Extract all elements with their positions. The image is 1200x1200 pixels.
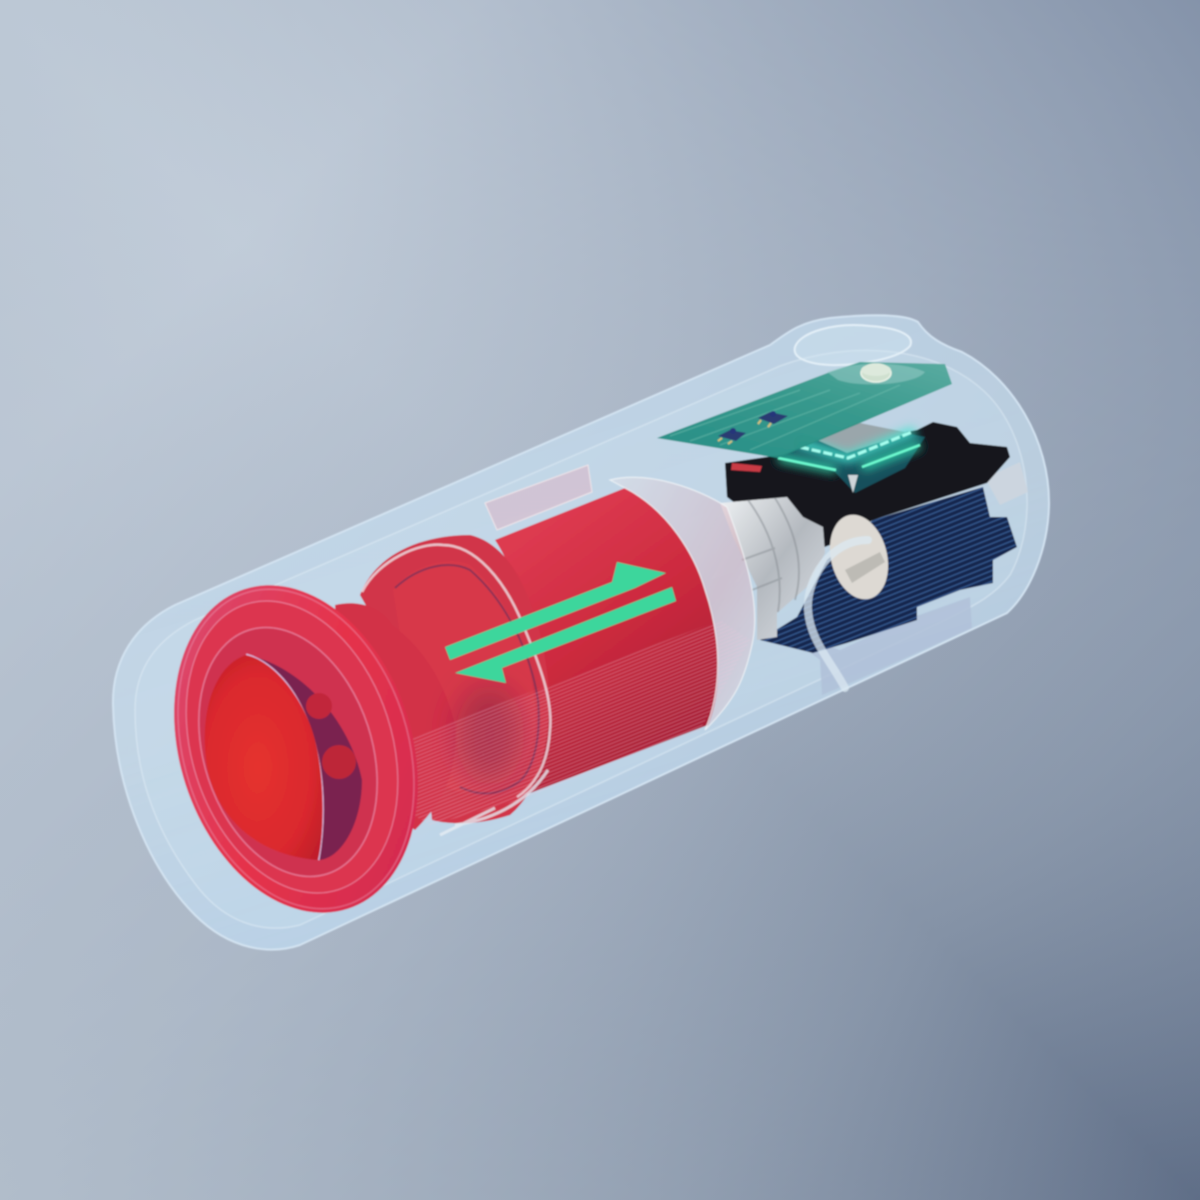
green double arrow: [445, 562, 676, 683]
chip with glowing LEDs: [777, 423, 925, 493]
black motor block: [725, 422, 1010, 560]
PCB sensor lens: [861, 364, 891, 382]
hatch overlay lines: [405, 620, 750, 825]
capsule top bump: [795, 325, 911, 365]
red main body cylinder: [495, 488, 718, 795]
dark shadow inside collar: [456, 685, 524, 785]
red neck: [335, 603, 455, 830]
green circuit board: [657, 362, 952, 458]
glass collar ring: [360, 535, 550, 835]
clear clip on top: [485, 465, 592, 530]
silver connector: [720, 497, 825, 640]
inner red cavity: [205, 655, 323, 860]
small red connector on block: [731, 463, 762, 472]
arrow: forward: [445, 562, 666, 660]
light grey rear blocks: [780, 462, 1028, 695]
device: transparent capsule assembly: [113, 315, 1049, 950]
navy heat-sink fins: [760, 487, 1017, 653]
grey silicone valve and tube: [808, 509, 897, 688]
PCB buttons: [718, 411, 788, 444]
inner cavity shadow and beads: [246, 655, 362, 860]
arrow: return: [455, 587, 676, 683]
capsule shell: [113, 315, 1049, 950]
red flange: [134, 553, 458, 945]
glass dome around red: [610, 477, 755, 730]
